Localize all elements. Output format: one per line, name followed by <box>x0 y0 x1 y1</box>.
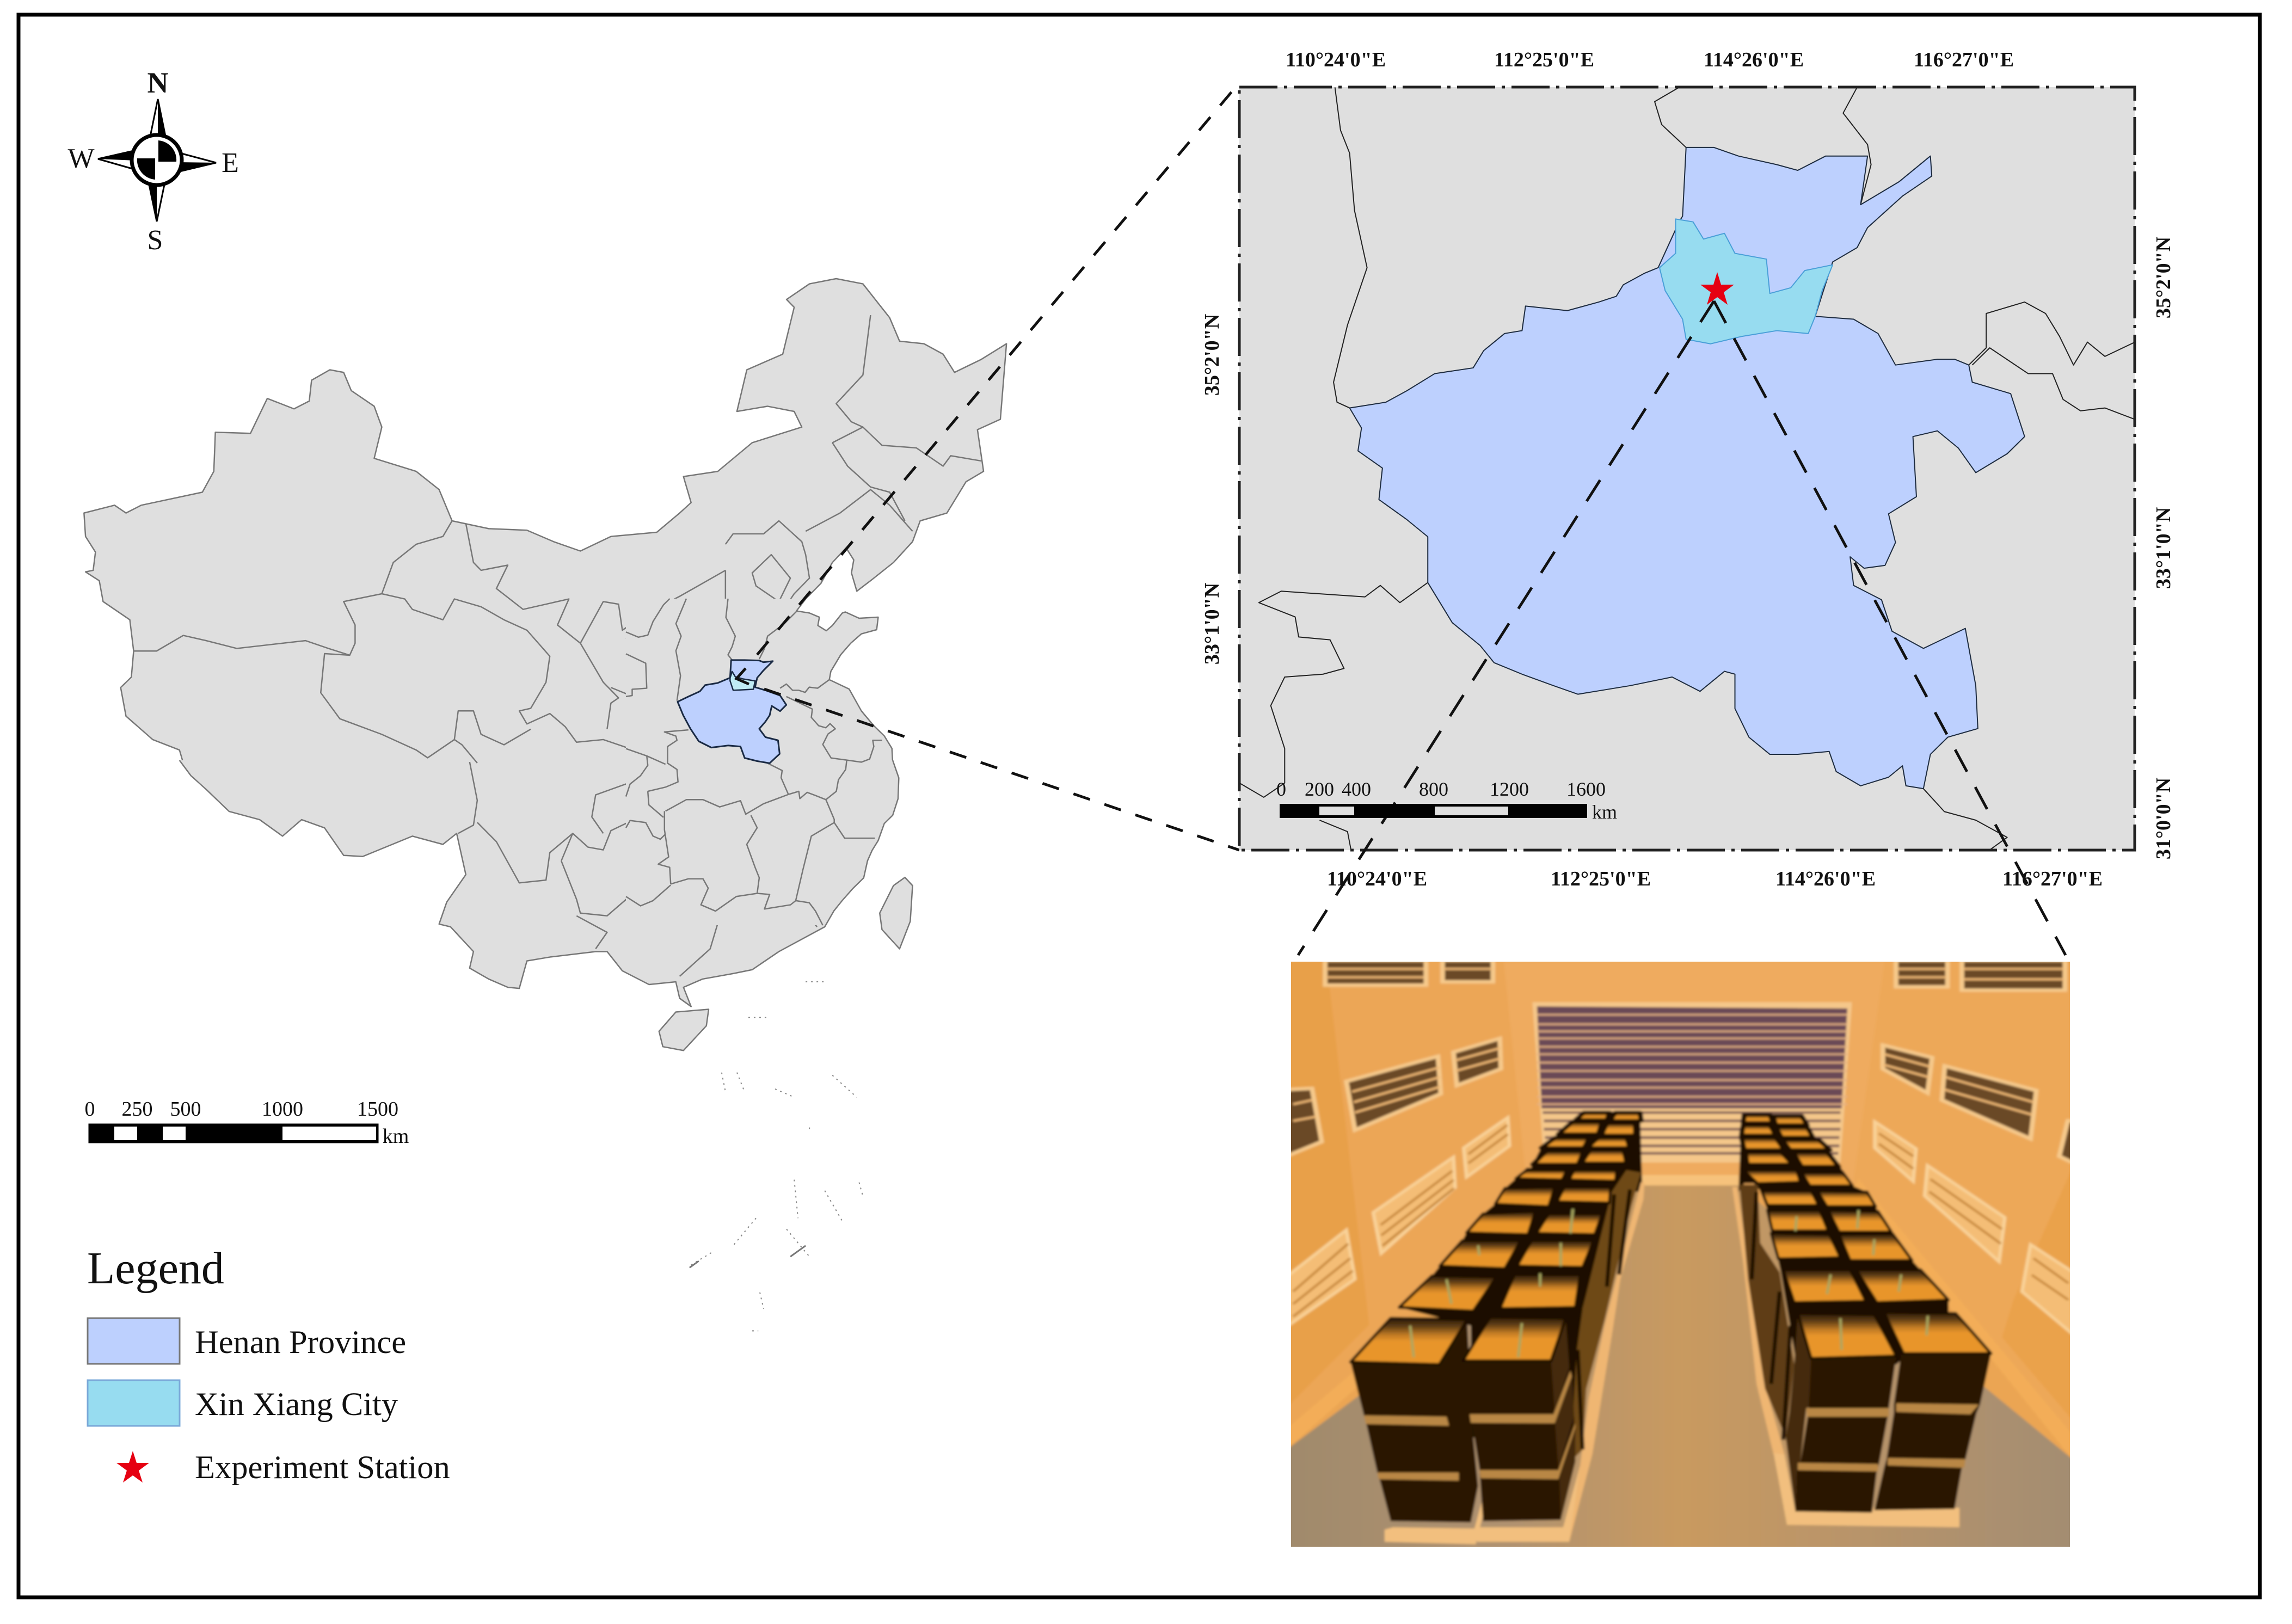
dashed leader lines from China map to inset <box>736 83 1239 850</box>
scale bar: China map: 1500 <box>357 1098 398 1121</box>
Henan and Xin Xiang on China map <box>678 660 786 763</box>
inset scale bar: 800 <box>1419 778 1448 800</box>
compass rose: E <box>222 147 239 179</box>
label: Henan Province: Henan Province <box>195 1324 406 1361</box>
right block of plant boxes <box>1732 1168 1991 1527</box>
photo: growth chamber with plant boxes <box>1286 958 2076 1550</box>
wall vents <box>1286 960 2074 1164</box>
coordinate labels: top: 112°25'0"E <box>1494 48 1594 71</box>
coordinate labels: bottom <box>1327 868 2103 890</box>
compass rose: W <box>67 143 95 174</box>
coordinate labels: top <box>1286 48 2014 71</box>
coordinate labels: top: 110°24'0"E <box>1286 48 1386 71</box>
box bands <box>1798 1404 1979 1472</box>
swatch: Xin Xiang City <box>88 1380 180 1426</box>
Taiwan <box>880 877 913 949</box>
Xin Xiang city shape <box>1660 219 1833 344</box>
coordinate labels: bottom: 110°24'0"E <box>1327 868 1427 890</box>
inset scale bar <box>1276 778 1617 823</box>
coordinate labels: left: 33°1'0"N <box>1201 583 1224 665</box>
coordinate labels: top: 116°27'0"E <box>1914 48 2014 71</box>
scale bar: China map: 0 <box>85 1098 95 1121</box>
legend <box>87 1243 450 1486</box>
experiment station star <box>1700 272 1734 305</box>
scale bar: China map: 250 <box>122 1098 152 1121</box>
right tray rail <box>1732 1187 1785 1454</box>
inset scale bar: 400 <box>1342 778 1371 800</box>
far box rows <box>1527 1112 1642 1192</box>
dashed leader lines from station to photo <box>1298 301 2066 955</box>
central China province borders <box>626 599 882 925</box>
coordinate labels: top: 114°26'0"E <box>1704 48 1804 71</box>
trays <box>1773 1453 1959 1527</box>
back wall louvre panel <box>1532 1002 1852 1162</box>
scale bar: China map: 1000 <box>262 1098 303 1121</box>
inset scale bar: 1200 <box>1490 778 1529 800</box>
compass rose: S <box>148 225 163 256</box>
swatch: Henan Province <box>88 1318 180 1364</box>
Hainan <box>659 1009 709 1050</box>
seedlings <box>1410 1209 1573 1357</box>
compass rose: N <box>147 66 169 99</box>
Henan province shape <box>1350 147 2025 789</box>
left block of plant boxes <box>1350 1168 1645 1544</box>
inset scale bar: 200 <box>1305 778 1334 800</box>
icon: red star <box>116 1451 149 1482</box>
inset frame <box>1239 87 2135 850</box>
box bands <box>1364 1370 1575 1480</box>
map: China provinces <box>84 279 1006 1331</box>
front boxes <box>1786 1313 1811 1511</box>
coordinate labels: right: 35°2'0"N <box>2152 237 2175 318</box>
coordinate labels: right: 33°1'0"N <box>2152 507 2175 589</box>
box tops with soil <box>1743 1170 1991 1358</box>
label: Xin Xiang City: Xin Xiang City <box>195 1386 398 1423</box>
inset scale bar: 1600 <box>1566 778 1606 800</box>
scale bar: China map: km <box>383 1125 409 1148</box>
inset scale bar: km <box>1592 801 1617 823</box>
legend title: Legend <box>87 1243 224 1294</box>
scale bar: China map <box>85 1098 409 1148</box>
label: Experiment Station: Experiment Station <box>195 1449 450 1486</box>
South China Sea islands <box>691 982 863 1331</box>
coordinate labels: bottom: 116°27'0"E <box>2002 868 2103 890</box>
coordinate labels: left: 35°2'0"N <box>1201 314 1224 396</box>
compass rose <box>67 66 239 256</box>
trays <box>1385 1497 1484 1544</box>
coordinate labels: right <box>2152 237 2175 859</box>
front boxes <box>1350 1318 1478 1522</box>
inset map: Henan province <box>1239 87 2135 850</box>
coordinate labels: bottom: 114°26'0"E <box>1775 868 1876 890</box>
floor <box>1286 1185 2076 1550</box>
coordinate labels: bottom: 112°25'0"E <box>1551 868 1651 890</box>
seedlings <box>1796 1210 1928 1350</box>
coordinate labels: left <box>1201 314 1224 665</box>
left tray rail <box>1563 1182 1645 1542</box>
coordinate labels: right: 31°0'0"N <box>2152 778 2175 859</box>
scale bar: China map: 500 <box>170 1098 201 1121</box>
inset scale bar: 0 <box>1276 778 1286 800</box>
box tops with soil <box>1350 1170 1617 1364</box>
